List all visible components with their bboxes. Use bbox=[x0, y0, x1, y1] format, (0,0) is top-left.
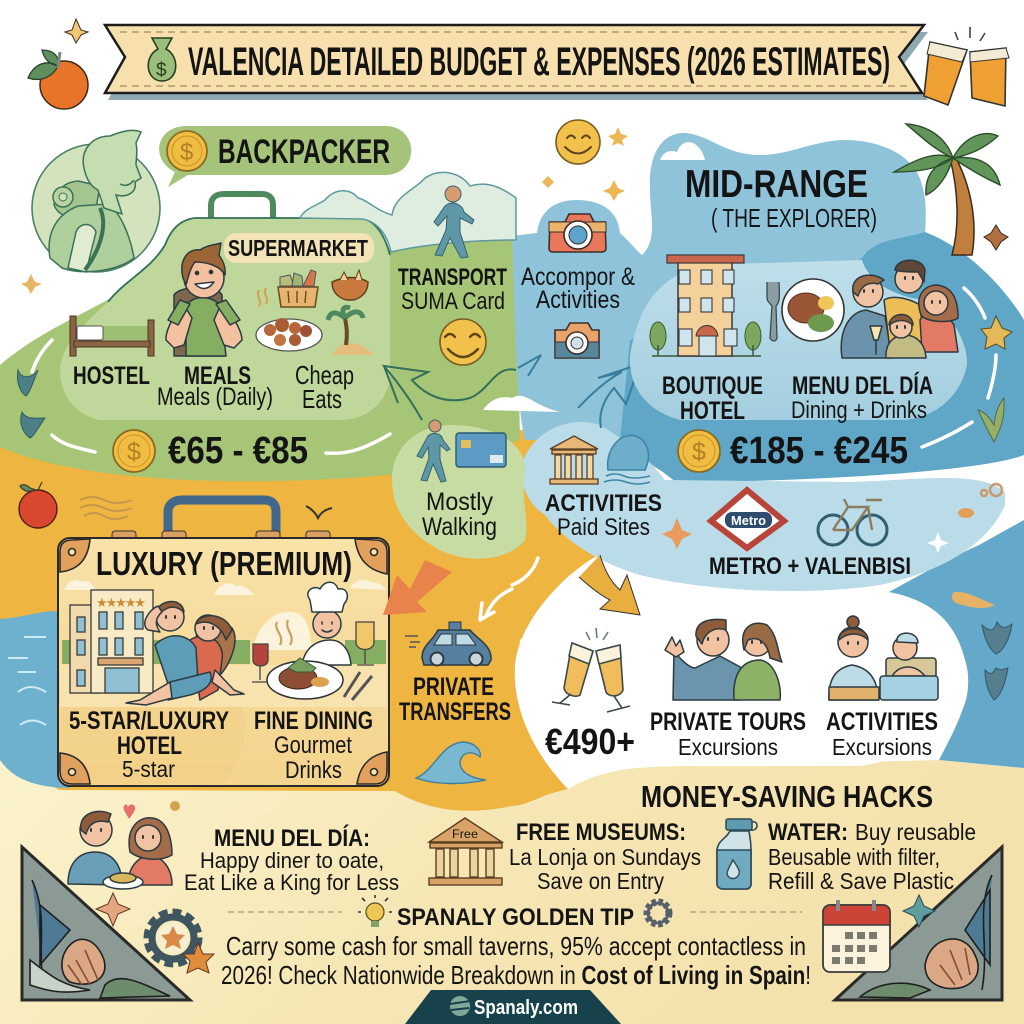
label: private transfers: PRIVATE bbox=[413, 673, 494, 701]
text: golden tip body: 2026! Check Nationwide Breakdown in Cost of Living in Spain! bbox=[221, 960, 811, 990]
icon: white cloud bbox=[660, 142, 705, 160]
icon: bed bbox=[70, 316, 154, 356]
icon: tapas plate bbox=[256, 318, 322, 351]
label: private transfers: TRANSFERS bbox=[399, 698, 511, 726]
label: menu del dia tip: MENU DEL DÍA: bbox=[214, 824, 370, 852]
icon: stars bbox=[542, 127, 628, 201]
icon: wind lines bbox=[80, 497, 132, 519]
icon: sparkle top left bbox=[65, 19, 88, 43]
heading: backpacker: BACKPACKER bbox=[218, 133, 390, 171]
panel: lower right blue bbox=[889, 520, 1024, 768]
label: private tours: PRIVATE TOURS bbox=[650, 708, 806, 736]
icon: orange camera bbox=[549, 214, 606, 252]
label: private transfers bbox=[399, 673, 511, 726]
text: cheap eats: Eats bbox=[302, 384, 342, 414]
corners: brass corners bbox=[60, 539, 387, 784]
icon: coin bbox=[678, 430, 720, 472]
panel: mid-range card bbox=[630, 163, 967, 425]
arrow: white to taxi bbox=[480, 558, 538, 620]
icon: leaves right bbox=[982, 622, 1012, 700]
speech bubble: backpacker heading bbox=[159, 126, 411, 187]
icon: coin bbox=[167, 131, 207, 171]
icon: free museum bbox=[429, 818, 502, 885]
icon: fork bbox=[767, 282, 779, 341]
icon: white wine glass bbox=[356, 622, 374, 665]
icon: smiley bbox=[440, 319, 486, 365]
price: luxury: €490+ bbox=[545, 721, 635, 762]
icon: family bbox=[841, 260, 958, 358]
text: meals daily: Meals (Daily) bbox=[157, 383, 273, 411]
label: private tours: Excursions bbox=[678, 734, 778, 760]
heading: golden tip: SPANALY GOLDEN TIP bbox=[397, 904, 634, 931]
label: water tip bbox=[768, 819, 976, 894]
icon: white sparkle bbox=[927, 532, 949, 553]
label: free museums tip: Save on Entry bbox=[537, 868, 664, 894]
icon: dinner plate bbox=[782, 279, 844, 341]
icon: luxury hotel bbox=[70, 590, 153, 693]
arrow: small blue arrowhead bbox=[518, 355, 541, 376]
text: cheap eats: Cheap bbox=[295, 360, 354, 390]
icon: brown sparkle bbox=[984, 225, 1008, 250]
label: menu del dia tip: Happy diner to oate, bbox=[200, 848, 384, 873]
icon: metro sign bbox=[711, 490, 784, 548]
icon: coin: $ bbox=[692, 438, 706, 466]
label: fine dining: FINE DINING bbox=[254, 707, 373, 735]
panel: mid-range blue background bbox=[512, 133, 926, 480]
icon: sea ripples bbox=[8, 637, 46, 725]
label: water tip: Buy reusable bbox=[855, 819, 976, 845]
heading: golden tip bbox=[358, 895, 669, 931]
panel: white top tier background bbox=[515, 553, 968, 789]
label: 5-star hotel: HOTEL bbox=[117, 732, 182, 760]
label: activities excursions: Excursions bbox=[832, 734, 932, 760]
label: hostel: HOSTEL bbox=[73, 362, 150, 390]
arrow: orange to luxury bbox=[383, 560, 452, 615]
label: boutique hotel: HOTEL bbox=[680, 397, 745, 425]
subheading: the explorer: ( THE EXPLORER) bbox=[711, 203, 877, 233]
icon: metro sign: Metro bbox=[731, 513, 766, 528]
label: activities excursions bbox=[826, 708, 938, 760]
icon: steam by basket bbox=[258, 288, 267, 306]
scene: backdrop bbox=[62, 640, 386, 664]
icon: small gear bbox=[647, 902, 669, 924]
icon: white cloud bbox=[483, 396, 560, 412]
label: fine dining: Gourmet bbox=[274, 732, 352, 759]
icon: clinking beer glasses bbox=[924, 27, 1009, 106]
panel: top tier content bbox=[545, 616, 938, 762]
icon: calendar bbox=[823, 900, 890, 972]
icon: bird bbox=[306, 506, 332, 518]
panel: backpacker green background bbox=[0, 218, 520, 481]
ornament: left corner bbox=[22, 847, 190, 1000]
icon: coin: $ bbox=[180, 139, 193, 166]
footer badge bbox=[405, 990, 621, 1024]
icon: classical building bbox=[550, 436, 598, 484]
panel: luxury yellow background bbox=[0, 430, 610, 811]
arrow: blue pair to mid-range bbox=[578, 364, 640, 428]
text: golden tip body bbox=[221, 931, 811, 990]
arrow: white dashes around green panel bbox=[32, 340, 390, 453]
icon: sand island bbox=[952, 592, 995, 608]
label: water tip: Refill & Save Plastic bbox=[768, 868, 954, 894]
label: boutique hotel: BOUTIQUE bbox=[662, 372, 763, 400]
icon: coin bbox=[113, 430, 155, 472]
text: cheap eats bbox=[295, 360, 354, 414]
heading: activities: ACTIVITIES bbox=[545, 490, 662, 517]
label: water tip: WATER: bbox=[768, 819, 848, 846]
label: boutique hotel bbox=[662, 372, 763, 425]
icon: money bag: $ bbox=[156, 60, 167, 81]
panel: luxury suitcase bbox=[58, 500, 389, 786]
icon: champagne flutes bbox=[552, 628, 630, 712]
icon: tour guide couple bbox=[665, 619, 782, 700]
icon: pink sparkle bbox=[96, 893, 130, 926]
heading: money-saving hacks: MONEY-SAVING HACKS bbox=[641, 779, 933, 814]
icon: gold star right bbox=[981, 316, 1012, 349]
icon: bicycle bbox=[818, 499, 887, 545]
panel: money-saving hacks bbox=[68, 779, 976, 895]
icon: orange fruit bbox=[28, 50, 88, 109]
icon: happy diners bbox=[68, 801, 180, 889]
price: mid-range: €185 - €245 bbox=[730, 430, 908, 472]
label: water tip: Beusable with filter, bbox=[768, 844, 940, 870]
panel: backpacker suitcase bbox=[60, 194, 390, 420]
icon: clouds behind transport bbox=[300, 172, 516, 252]
icon: luxury hotel: ★★★★★ bbox=[96, 595, 146, 610]
price: backpacker: €65 - €85 bbox=[168, 430, 308, 472]
icon: teal sparkle bbox=[903, 895, 935, 927]
icon: orange sparkle bbox=[662, 518, 692, 549]
icon: chef bbox=[302, 582, 351, 665]
label: meals: MEALS bbox=[184, 362, 251, 390]
icon: leaf sprig right bbox=[978, 398, 1004, 442]
icon: globe logo bbox=[450, 996, 470, 1016]
icon: bowl of food bbox=[332, 270, 368, 300]
heading: mid-range: MID-RANGE bbox=[685, 163, 868, 206]
label: menu del dia: MENU DEL DÍA bbox=[792, 371, 933, 400]
label: activities excursions: ACTIVITIES bbox=[826, 708, 938, 736]
arrow: curve to backpacker suitcase bbox=[384, 366, 516, 420]
text: paid sites: Paid Sites bbox=[557, 514, 650, 541]
panel: mostly walking bubble bbox=[392, 420, 526, 559]
icon: steak plate bbox=[267, 658, 343, 699]
text: transport bbox=[398, 264, 507, 315]
icon: taxi bbox=[405, 622, 491, 666]
icon: light bulb bbox=[358, 895, 392, 927]
icon: walking person bbox=[417, 420, 450, 482]
icon: apple bbox=[19, 482, 57, 528]
icon: leaves left bbox=[17, 370, 45, 438]
label: 5-star hotel: 5-star bbox=[122, 756, 175, 782]
icon: relaxing couple bbox=[126, 601, 244, 705]
icon: grocery basket bbox=[278, 270, 318, 307]
icon: cutlery bbox=[344, 672, 372, 700]
icon: spa treatment bbox=[829, 616, 938, 700]
label: free museums tip: La Lonja on Sundays bbox=[509, 844, 701, 870]
panel: dark blue band bbox=[620, 232, 1024, 482]
icon: red wine glass bbox=[252, 644, 269, 682]
icon: blue camera bbox=[555, 323, 599, 358]
label: fine dining bbox=[254, 707, 373, 784]
icon: wave bbox=[416, 742, 486, 784]
icon: boutique hotel bbox=[650, 255, 761, 356]
panel: cream hacks background bbox=[0, 755, 1024, 1024]
icon: coin: $ bbox=[127, 438, 141, 466]
label: fine dining: Drinks bbox=[285, 757, 342, 784]
label: private tours bbox=[650, 708, 806, 760]
text: dining and drinks: Dining + Drinks bbox=[791, 397, 927, 424]
text: accompor activities: Accompor & bbox=[521, 263, 635, 291]
scene: clouds and steam mound bbox=[64, 580, 386, 650]
icon: steam bbox=[276, 620, 292, 645]
text: golden tip body: Carry some cash for small taverns, 95% accept contactless in bbox=[226, 931, 806, 961]
text: transport: SUMA Card bbox=[401, 288, 505, 315]
text: mostly walking bbox=[422, 488, 497, 541]
text: mostly walking: Mostly bbox=[426, 488, 493, 516]
panel: activities blob and metro bbox=[520, 422, 1005, 591]
footer text: Spanaly.com bbox=[474, 997, 578, 1019]
icon: happy backpacker bbox=[166, 243, 242, 356]
price: backpacker bbox=[113, 430, 308, 472]
icon: money bag bbox=[148, 38, 176, 81]
icon: wave splash bbox=[604, 435, 650, 484]
label: free museums tip bbox=[509, 819, 701, 894]
text: transport: TRANSPORT bbox=[398, 264, 507, 291]
icon: sparkle left bbox=[21, 274, 42, 294]
icon: water bottle bbox=[717, 819, 757, 889]
text: mostly walking: Walking bbox=[422, 513, 497, 541]
arrow: gold to white panel bbox=[579, 555, 640, 615]
label: menu del dia tip: Eat Like a King for Less bbox=[184, 870, 399, 895]
text: accompor activities bbox=[521, 263, 635, 314]
label: menu del dia tip bbox=[184, 824, 399, 895]
icon: walking person transport bbox=[434, 186, 474, 258]
label: 5-star hotel: 5-STAR/LUXURY bbox=[69, 707, 229, 735]
icon: small coins top right bbox=[958, 484, 1002, 518]
label: metro + valenbisi: METRO + VALENBISI bbox=[709, 553, 911, 580]
icon: smiley top middle bbox=[556, 120, 600, 164]
price: mid-range bbox=[678, 430, 908, 472]
icon: free museum: Free bbox=[452, 827, 478, 841]
heading: luxury premium: LUXURY (PREMIUM) bbox=[96, 545, 352, 582]
icon: credit card bbox=[456, 433, 506, 467]
icon: backpacker portrait bbox=[32, 130, 160, 272]
icon: palm tree bbox=[894, 124, 1000, 255]
scene: sand bbox=[60, 665, 387, 707]
panel: sea on the left bbox=[0, 611, 70, 788]
label: supermarket: SUPERMARKET bbox=[228, 235, 368, 261]
arrow: white dashes on dark band bbox=[922, 288, 996, 447]
ornament: right corner bbox=[835, 847, 1002, 1000]
text: accompor activities: Activities bbox=[536, 286, 620, 314]
title ribbon bbox=[105, 25, 928, 100]
icon: gear with star bbox=[149, 914, 214, 973]
label: 5-star hotel bbox=[69, 707, 229, 782]
label: free museums tip: FREE MUSEUMS: bbox=[516, 819, 686, 846]
icon: small palm on island bbox=[328, 307, 374, 355]
